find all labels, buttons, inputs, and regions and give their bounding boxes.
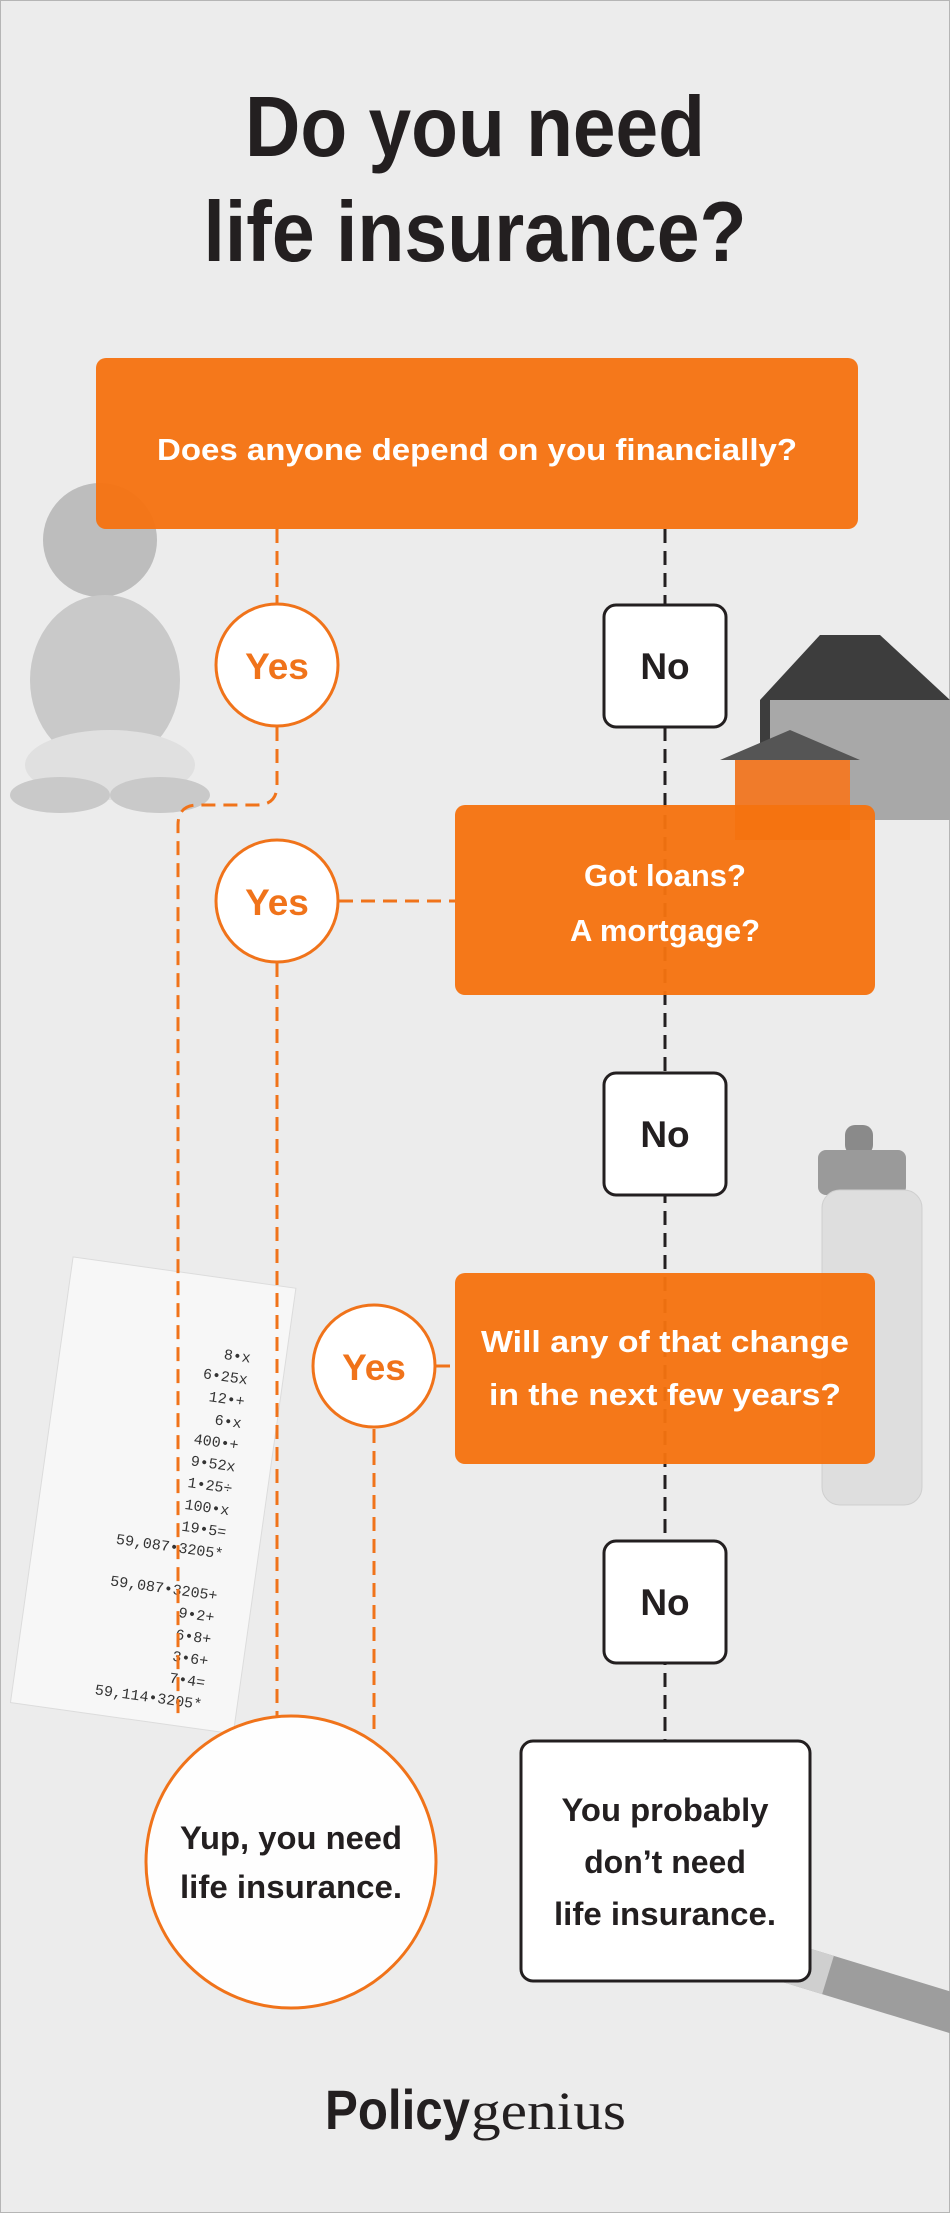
yes circle 2 xyxy=(216,840,338,962)
no box 3 xyxy=(604,1541,726,1663)
photo: receipt: 400•+ xyxy=(193,1432,240,1455)
no box 2: No xyxy=(640,1114,690,1155)
photo: receipt: 59,087•3205* xyxy=(115,1532,224,1564)
yes circle 1 xyxy=(216,604,338,726)
result circle: yup you need: life insurance. xyxy=(180,1869,402,1905)
no box 3: No xyxy=(640,1582,690,1623)
photo: receipt: 6•25x xyxy=(202,1366,249,1389)
result box: probably don't need: don’t need xyxy=(584,1844,746,1880)
photo: receipt: 9•2+ xyxy=(177,1605,215,1627)
result box: probably don't need: life insurance. xyxy=(554,1896,776,1932)
yes circle 2: Yes xyxy=(245,882,309,923)
title: Do you need xyxy=(245,80,705,175)
photo: receipt: 100•x xyxy=(183,1497,230,1520)
box: will any change: in the next few years? xyxy=(489,1377,841,1412)
box: loans xyxy=(455,805,875,995)
title xyxy=(204,80,746,280)
photo: receipt: 6•8+ xyxy=(174,1627,212,1649)
box: will any change: Will any of that change xyxy=(481,1324,849,1359)
photo: receipt: 8•x xyxy=(223,1347,252,1368)
box: loans: A mortgage? xyxy=(570,913,760,948)
photo: receipt: 59,114•3205* xyxy=(94,1682,203,1714)
result circle: yup you need: Yup, you need xyxy=(180,1820,402,1856)
box: loans: Got loans? xyxy=(584,858,746,893)
photo: receipt: 19•5= xyxy=(180,1519,227,1542)
photo: receipt: 6•x xyxy=(213,1412,243,1433)
box: does anyone depend on you: Does anyone depend on you financially? xyxy=(157,432,797,467)
photo: receipt: 12•+ xyxy=(208,1389,246,1411)
photo: baby xyxy=(10,483,210,813)
no box 1: No xyxy=(640,646,690,687)
photo: receipt: 59,087•3205+ xyxy=(109,1573,218,1605)
box: does anyone depend on you xyxy=(96,358,858,529)
yes circle 3 xyxy=(313,1305,435,1427)
result box: probably don't need xyxy=(521,1741,810,1981)
photo: baby bottle xyxy=(818,1125,922,1505)
photo: receipt: 1•25÷ xyxy=(186,1475,233,1498)
logo: Policy xyxy=(325,2078,470,2141)
photo: receipt: 3•6+ xyxy=(171,1649,209,1671)
photo: house xyxy=(720,635,950,840)
logo: genius xyxy=(471,2081,626,2141)
yes circle 3: Yes xyxy=(342,1347,406,1388)
photo: receipt: 9•52x xyxy=(190,1453,236,1476)
title: life insurance? xyxy=(204,185,746,280)
photo: pencil xyxy=(770,1940,950,2039)
result circle: yup you need xyxy=(146,1716,436,2008)
yes circle 1: Yes xyxy=(245,646,309,687)
logo xyxy=(325,2078,626,2141)
result box: probably don't need: You probably xyxy=(562,1792,769,1828)
box: will any change xyxy=(455,1273,875,1464)
no box 1 xyxy=(604,605,726,727)
photo: receipt xyxy=(10,1257,296,1734)
connector lines xyxy=(178,529,665,1740)
photo: receipt: 7•4= xyxy=(168,1671,206,1692)
no box 2 xyxy=(604,1073,726,1195)
